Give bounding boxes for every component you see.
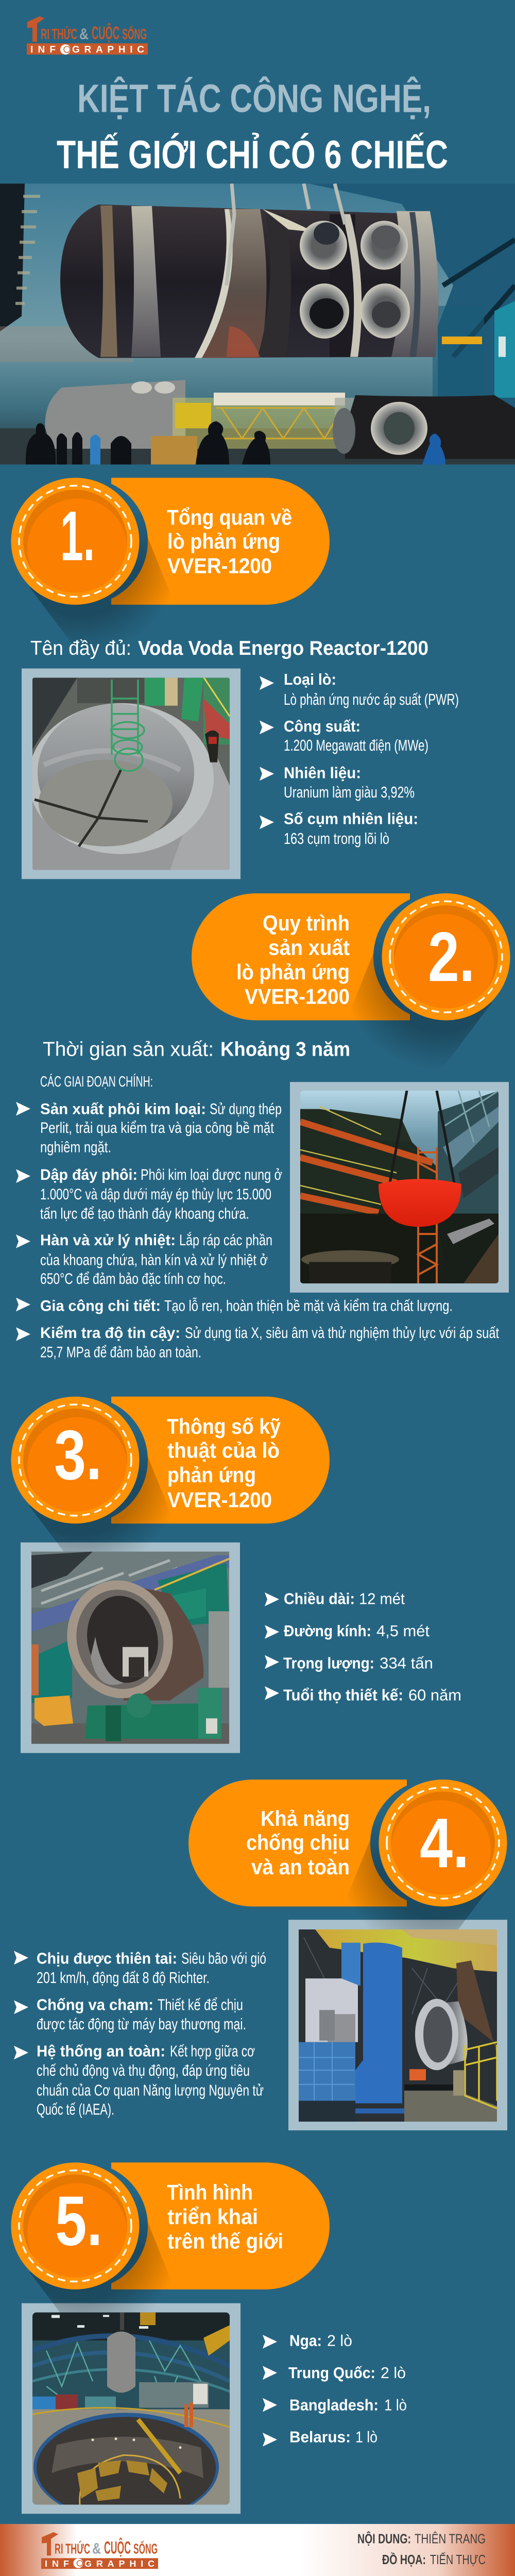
bullet: Bangladesh: 1 lò bbox=[384, 2396, 407, 2414]
bullet: safety system: Kết hợp giữa cơ bbox=[170, 2042, 255, 2060]
bullet: welding: của khoang chứa, hàn kín và xử lý nhiệt ở bbox=[40, 1252, 268, 1268]
photo 4: blue machine and steel ring bbox=[299, 1929, 497, 2122]
heading 1: Tổng quan về bbox=[167, 505, 292, 529]
heading 5: trên thế giới bbox=[167, 2229, 283, 2253]
bullet: power: 1.200 Megawatt điện (MWe) bbox=[284, 736, 428, 754]
photo frame 4 bbox=[288, 1920, 507, 2130]
bullet: welding bbox=[16, 1232, 272, 1287]
heading 2: lò phản ứng bbox=[236, 960, 350, 984]
section 4 bbox=[14, 1780, 507, 2130]
bullet: Bangladesh: Bangladesh: bbox=[289, 2396, 379, 2414]
bullet: impact resistance: Chống va chạm: bbox=[37, 1996, 153, 2013]
photo frame 2 bbox=[290, 1082, 509, 1293]
heading 4 bbox=[246, 1806, 350, 1879]
bullet: welding: Hàn và xử lý nhiệt: bbox=[40, 1232, 176, 1249]
bullet: design life bbox=[265, 1686, 461, 1704]
bullet: metal billet: nghiêm ngặt. bbox=[40, 1139, 111, 1156]
bullet: fuel assemblies: Số cụm nhiên liệu: bbox=[284, 810, 418, 827]
heading 4: chống chịu bbox=[246, 1831, 350, 1855]
bullet: Russia bbox=[263, 2332, 352, 2350]
bullet: welding: 650°C để đảm bảo đặc tính cơ học. bbox=[40, 1270, 226, 1287]
title bbox=[57, 76, 448, 177]
logo: Tri Thuc & Cuoc Song Infographic: & bbox=[79, 25, 89, 43]
full name line: Voda Voda Energo Reactor-1200 bbox=[138, 637, 428, 659]
bullet: safety system: Hệ thống an toàn: bbox=[37, 2042, 165, 2060]
bullet: power: Công suất: bbox=[284, 717, 360, 735]
heading 1 bbox=[167, 505, 292, 578]
bullet: reliability test bbox=[16, 1325, 500, 1361]
bullet: impact resistance: Thiết kế để chịu bbox=[158, 1996, 243, 2013]
bullet: Bangladesh bbox=[263, 2396, 407, 2414]
heading 3: VVER-1200 bbox=[167, 1488, 272, 1512]
bullet: length: Chiều dài: bbox=[284, 1590, 355, 1608]
bullet: weight: 334 tấn bbox=[380, 1654, 433, 1672]
bullet: Belarus: Belarus: bbox=[289, 2428, 351, 2446]
heading 3: Thông số kỹ bbox=[167, 1414, 281, 1438]
bullet: stamping: Phôi kim loại được nung ở bbox=[141, 1166, 282, 1183]
main stages label: CÁC GIAI ĐOẠN CHÍNH: bbox=[40, 1073, 153, 1090]
credits: NỘI DUNG: bbox=[357, 2531, 411, 2547]
bullet: reactor type bbox=[260, 670, 459, 708]
badge 3 with pill bbox=[11, 1396, 330, 1608]
heading 5 bbox=[167, 2180, 283, 2253]
bullet: China: 2 lò bbox=[381, 2364, 406, 2382]
heading 2 bbox=[236, 911, 350, 1009]
number 2: 2. bbox=[428, 918, 475, 996]
bullet: metal billet: Perlit, trải qua kiểm tra và gia công bề mặt bbox=[40, 1120, 274, 1137]
bullet: Russia: 2 lò bbox=[327, 2332, 352, 2350]
logo: Tri Thuc & Cuoc Song Infographic: GRAPHIC bbox=[72, 44, 144, 55]
number 4: 4. bbox=[420, 1804, 469, 1883]
logo: Tri Thuc & Cuoc Song Infographic: SỐNG bbox=[122, 25, 147, 43]
heading 5: triển khai bbox=[167, 2205, 258, 2229]
footer logo: CUỘC bbox=[104, 2537, 131, 2557]
bullet: metal billet: Sản xuất phôi kim loại: bbox=[40, 1101, 206, 1117]
credits: ĐỒ HỌA: bbox=[382, 2552, 426, 2567]
heading 3: thuật của lò bbox=[167, 1438, 280, 1463]
footer logo: RI THỨC bbox=[55, 2541, 90, 2556]
bullet: China bbox=[263, 2364, 406, 2382]
bullet: fuel assemblies bbox=[260, 810, 418, 848]
heading 1: VVER-1200 bbox=[167, 554, 272, 578]
bullet: welding: Lắp ráp các phần bbox=[179, 1232, 272, 1249]
bullet: power bbox=[260, 717, 428, 754]
production time line bbox=[43, 1039, 350, 1061]
badge 2 with pill bbox=[192, 893, 510, 1105]
heading 2: VVER-1200 bbox=[245, 985, 350, 1009]
bullet: safety system bbox=[14, 2042, 264, 2118]
photo frame 5 bbox=[22, 2303, 241, 2514]
bullet: diameter: 4,5 mét bbox=[376, 1622, 430, 1640]
heading 4: và an toàn bbox=[251, 1855, 350, 1879]
bullet: safety system: Quốc tế (IAEA). bbox=[37, 2100, 114, 2118]
bullet: design life: Tuổi thọ thiết kế: bbox=[283, 1686, 403, 1704]
credits: THIÊN TRANG bbox=[415, 2532, 486, 2547]
photo 1: vessel ring interior bbox=[28, 677, 230, 870]
production time line: Thời gian sản xuất: bbox=[43, 1039, 214, 1061]
credits bbox=[357, 2531, 486, 2567]
bullet: Belarus: 1 lò bbox=[355, 2428, 377, 2446]
bullet: weight bbox=[265, 1654, 433, 1672]
bullet: Belarus bbox=[263, 2428, 377, 2447]
logo: Tri Thuc & Cuoc Song Infographic bbox=[27, 16, 148, 55]
bullet: impact resistance: được tác động từ máy bay thương mại. bbox=[37, 2015, 246, 2033]
heading 3 bbox=[167, 1414, 281, 1512]
bullet: natural disasters bbox=[14, 1950, 266, 1987]
heading 1: lò phản ứng bbox=[167, 529, 280, 553]
hero photo: reactor vessel lifted in factory bbox=[0, 183, 515, 465]
number 1: 1. bbox=[60, 497, 95, 575]
photo 3: vessel on green rollers bbox=[31, 1552, 229, 1744]
bullet: diameter bbox=[265, 1622, 430, 1640]
photo 5: vessel over reactor pit bbox=[32, 2312, 230, 2521]
footer logo: & bbox=[92, 2540, 101, 2557]
photo 2: red-hot forged dome bbox=[300, 1091, 499, 1283]
bullet: reliability test: 25,7 MPa để đảm bảo an toàn. bbox=[40, 1344, 201, 1361]
production time line: Khoảng 3 năm bbox=[220, 1039, 350, 1061]
bullet: safety system: chuẩn của Cơ quan Năng lượng Nguyên tử bbox=[37, 2081, 264, 2099]
bullet: reactor type: Loại lò: bbox=[284, 670, 336, 688]
bullet: metal billet bbox=[16, 1101, 282, 1156]
bullet: metal billet: Sử dụng thép bbox=[210, 1101, 282, 1117]
bullet: natural disasters: Chịu được thiên tai: bbox=[37, 1950, 177, 1967]
section 5 bbox=[11, 2162, 407, 2521]
bullet: design life: 60 năm bbox=[408, 1686, 461, 1704]
section 3 bbox=[11, 1396, 461, 1753]
full name line: Tên đầy đủ: bbox=[30, 637, 131, 659]
heading 5: Tình hình bbox=[167, 2180, 253, 2205]
footer logo: GRAPHIC bbox=[84, 2558, 154, 2569]
bullet: stamping bbox=[16, 1166, 282, 1222]
logo: Tri Thuc & Cuoc Song Infographic: INF bbox=[30, 44, 56, 55]
photo frame 1 bbox=[22, 669, 241, 879]
bullet: fuel assemblies: 163 cụm trong lõi lò bbox=[284, 829, 389, 848]
bullet: China: Trung Quốc: bbox=[288, 2364, 375, 2382]
section 2 bbox=[16, 893, 510, 1361]
bullet: machining bbox=[16, 1298, 453, 1315]
badge 1 with pill bbox=[11, 478, 330, 689]
number 3: 3. bbox=[54, 1416, 102, 1495]
logo: Tri Thuc & Cuoc Song Infographic: RI THỨC bbox=[41, 25, 77, 43]
section 1 bbox=[11, 478, 459, 879]
bullet: weight: Trọng lượng: bbox=[283, 1654, 374, 1672]
badge 5 with pill bbox=[11, 2162, 330, 2374]
bullet: Russia: Nga: bbox=[289, 2332, 322, 2350]
bullet: natural disasters: 201 km/h, động đất 8 độ Richter. bbox=[37, 1969, 210, 1987]
bullet: stamping: 1.000°C và dập dưới máy ép thủy lực 15.000 bbox=[40, 1186, 271, 1203]
number 5: 5. bbox=[55, 2182, 102, 2261]
bullet: natural disasters: Siêu bão với gió bbox=[181, 1950, 266, 1967]
bullet: safety system: chế chủ động và thụ động, đáp ứng tiêu bbox=[37, 2061, 250, 2079]
badge 4 with pill bbox=[188, 1780, 507, 1991]
bullet: fuel: Nhiên liệu: bbox=[284, 764, 361, 782]
photo frame 3 bbox=[21, 1543, 240, 1753]
bullet: fuel: Uranium làm giàu 3,92% bbox=[284, 783, 415, 801]
heading 3: phản ứng bbox=[167, 1463, 256, 1487]
bullet: impact resistance bbox=[14, 1996, 246, 2033]
bullet: fuel bbox=[260, 764, 415, 801]
bullet: machining: Gia công chi tiết: bbox=[40, 1298, 161, 1315]
bullet: reliability test: Kiểm tra độ tin cậy: bbox=[40, 1325, 180, 1342]
bullet: diameter: Đường kính: bbox=[284, 1622, 371, 1640]
bullet: stamping: tấn lực để tạo thành đáy khoang chứa. bbox=[40, 1206, 249, 1222]
footer logo bbox=[41, 2532, 158, 2569]
heading 2: Quy trình bbox=[263, 911, 350, 935]
heading 2: sản xuất bbox=[268, 936, 350, 960]
logo: Tri Thuc & Cuoc Song Infographic: CUỘC bbox=[92, 23, 119, 43]
bullet: length bbox=[265, 1590, 405, 1608]
heading 4: Khả năng bbox=[261, 1806, 350, 1831]
footer logo: SỐNG bbox=[133, 2540, 158, 2556]
bullet: length: 12 mét bbox=[359, 1590, 405, 1608]
footer bbox=[0, 2524, 515, 2576]
footer logo: INF bbox=[45, 2558, 69, 2569]
bullet: stamping: Dập đáy phôi: bbox=[40, 1166, 138, 1183]
credits: TIẾN THỰC bbox=[430, 2552, 486, 2567]
